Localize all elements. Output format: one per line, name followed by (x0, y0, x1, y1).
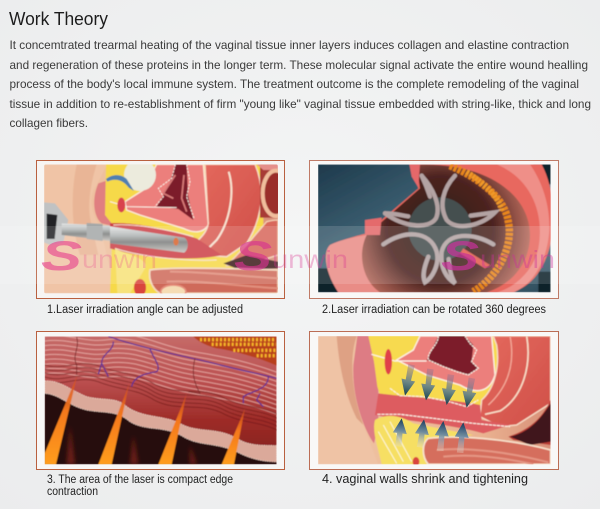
panel 2 frame (310, 160, 558, 298)
caption 4: 4. vaginal walls shrink and tightening (322, 471, 528, 486)
panel 4 illustration: tightening walls with arrows (318, 336, 551, 466)
panel 4 frame (310, 332, 558, 470)
blood vessels (98, 336, 277, 407)
watermark: Sunwin centre: S (234, 232, 272, 279)
panel 2 illustration: rotating laser inside vaginal canal (318, 164, 553, 292)
body paragraph: It concemtrated trearmal heating of the vaginal tissue inner layers induces collagen and elastine contraction (10, 38, 569, 52)
watermark: Sunwin left: S (41, 232, 82, 279)
caption 3: contraction (47, 486, 98, 498)
title: Work Theory (9, 9, 108, 29)
watermark: Sunwin right: unwin (480, 246, 555, 274)
watermark band (0, 226, 600, 284)
watermark: Sunwin left: unwin (82, 246, 157, 274)
body paragraph: and regeneration of these proteins in the longer term. These molecular signal activate the entire wound healling (10, 58, 588, 72)
laser beams (45, 375, 245, 464)
panel 1 frame (36, 160, 284, 298)
body paragraph: collagen fibers. (10, 116, 88, 130)
watermark: Sunwin right (441, 232, 555, 279)
dark underlying cavity (45, 393, 277, 464)
arrows pushing down (402, 364, 476, 408)
watermark: Sunwin left (41, 232, 157, 279)
watermark: Sunwin centre: unwin (272, 246, 348, 274)
body paragraph: process of the body's local immune system. The treatment outcome is the complete remodeling of the vaginal (10, 77, 579, 91)
fat layer top right (193, 336, 277, 366)
caption 3: 3. The area of the laser is compact edge (47, 474, 233, 486)
panel 4: vaginal walls shrink (310, 332, 558, 470)
body paragraph (10, 38, 591, 130)
watermark: Sunwin centre (234, 232, 348, 279)
panel 3: compact edge contraction (36, 331, 285, 470)
watermark: Sunwin right: S (441, 232, 479, 279)
panel 3 frame (36, 332, 284, 470)
body paragraph: tissue in addition to re-establishment of firm "young like" vaginal tissue embedded with string-like, thick and long (10, 97, 591, 111)
caption 1: 1.Laser irradiation angle can be adjusted (47, 304, 243, 316)
panel 2: laser rotated 360 degrees (310, 160, 558, 298)
caption 2: 2.Laser irradiation can be rotated 360 degrees (322, 304, 546, 316)
panel 1 anatomical illustration with laser probe (44, 164, 278, 294)
arrows pushing up (391, 417, 470, 454)
laser probe (44, 202, 188, 253)
caption 3 (47, 474, 233, 498)
panel 3 illustration: tissue layers with laser beams (45, 331, 285, 464)
panel 1: laser irradiation angle (36, 159, 289, 298)
